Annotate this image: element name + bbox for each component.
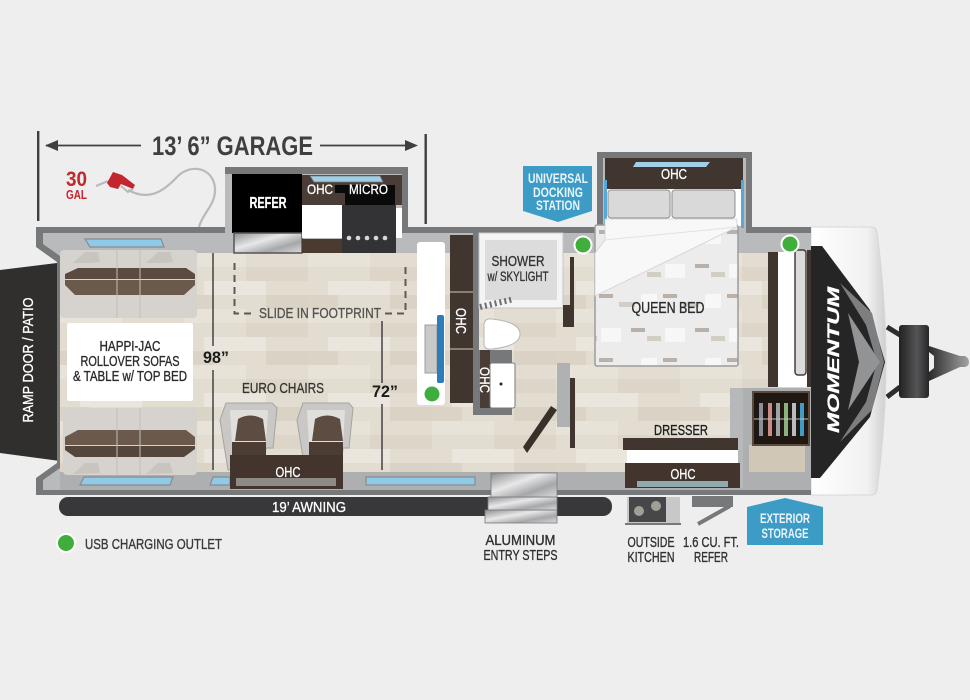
euro chairs label: EURO CHAIRS <box>242 380 324 397</box>
wall cabinets: OHC <box>452 308 468 334</box>
sofa and table label: & TABLE w/ TOP BED <box>73 369 187 385</box>
bathroom vanity: OHC <box>477 367 493 393</box>
fuel station icon: GAL <box>66 187 87 202</box>
bathroom vanity <box>473 350 515 415</box>
toilet <box>484 319 520 349</box>
bedroom cabinet <box>768 250 811 387</box>
sofa and table label: ROLLOVER SOFAS <box>80 354 180 370</box>
legend: USB charging outlet: USB CHARGING OUTLET <box>85 536 222 553</box>
entry door <box>523 363 575 453</box>
kitchen slide <box>232 174 402 253</box>
sink counter <box>417 242 445 405</box>
bed overhead cabinet <box>605 158 743 189</box>
awning: 19’ AWNING <box>272 499 346 516</box>
sofa and table label: HAPPI-JAC <box>100 339 160 355</box>
outside kitchen: OUTSIDE <box>628 534 674 551</box>
kitchen overhead cabinet label: OHC <box>307 181 333 197</box>
bathroom wall <box>563 257 574 327</box>
garage dimension <box>37 131 427 224</box>
aluminum entry steps <box>484 473 558 564</box>
wall cabinets <box>450 233 479 415</box>
shower: SHOWER <box>492 253 545 270</box>
interior floor <box>43 158 811 490</box>
callout: universal docking station: UNIVERSAL <box>528 170 588 186</box>
ramp door <box>0 263 60 461</box>
garage dimension: 13’ 6” GARAGE <box>152 131 313 161</box>
fuel station icon: 30 <box>66 168 87 191</box>
dresser: OHC <box>670 466 696 483</box>
closet and storage <box>730 388 811 488</box>
callout: universal docking station <box>523 166 592 222</box>
ramp door: RAMP DOOR / PATIO <box>20 298 37 422</box>
queen bed <box>595 180 744 366</box>
callout: exterior storage: STORAGE <box>762 525 808 541</box>
fuel station icon <box>66 168 215 227</box>
euro chair right <box>297 403 353 470</box>
callout: exterior storage: EXTERIOR <box>760 510 810 526</box>
callout: universal docking station: STATION <box>536 197 580 213</box>
sofa and table label <box>67 323 193 401</box>
window skylights <box>80 239 475 485</box>
dresser: DRESSER <box>654 422 708 439</box>
trailer walls <box>36 152 811 495</box>
shower <box>479 233 563 308</box>
sofa top <box>60 250 197 318</box>
aluminum entry steps: ALUMINUM <box>486 532 556 549</box>
bed overhead cabinet: OHC <box>661 166 687 183</box>
awning <box>59 497 612 516</box>
slide in footprint <box>234 263 406 322</box>
overhead cabinet over chairs <box>230 455 343 489</box>
outside refrigerator: 1.6 CU. FT. <box>683 534 739 551</box>
dimension 98 inch: 98” <box>203 348 229 367</box>
outside kitchen <box>625 497 681 566</box>
callout: universal docking station: DOCKING <box>533 184 583 200</box>
refrigerator label: REFER <box>250 195 286 212</box>
outside refrigerator <box>683 496 739 566</box>
brand name: MOMENTUM <box>824 286 843 433</box>
trailer front cap <box>811 227 886 495</box>
queen bed: QUEEN BED <box>632 300 704 317</box>
callout: exterior storage <box>747 498 823 545</box>
legend: USB charging outlet <box>57 534 222 553</box>
top and bottom wall bands <box>60 233 811 490</box>
overhead cabinet over chairs: OHC <box>276 464 301 481</box>
shower: w/ SKYLIGHT <box>487 268 549 284</box>
outside kitchen: KITCHEN <box>628 549 674 566</box>
microwave label: MICRO <box>349 181 388 197</box>
tongue hitch <box>887 325 969 398</box>
sofa bottom <box>63 408 197 475</box>
dimension 72 inch: 72” <box>372 382 398 401</box>
aluminum entry steps: ENTRY STEPS <box>484 547 558 564</box>
outside refrigerator: REFER <box>694 549 728 566</box>
euro chair left <box>220 403 277 470</box>
dresser <box>623 422 740 488</box>
slide in footprint: SLIDE IN FOOTPRINT <box>259 305 381 322</box>
USB outlets <box>424 236 798 402</box>
